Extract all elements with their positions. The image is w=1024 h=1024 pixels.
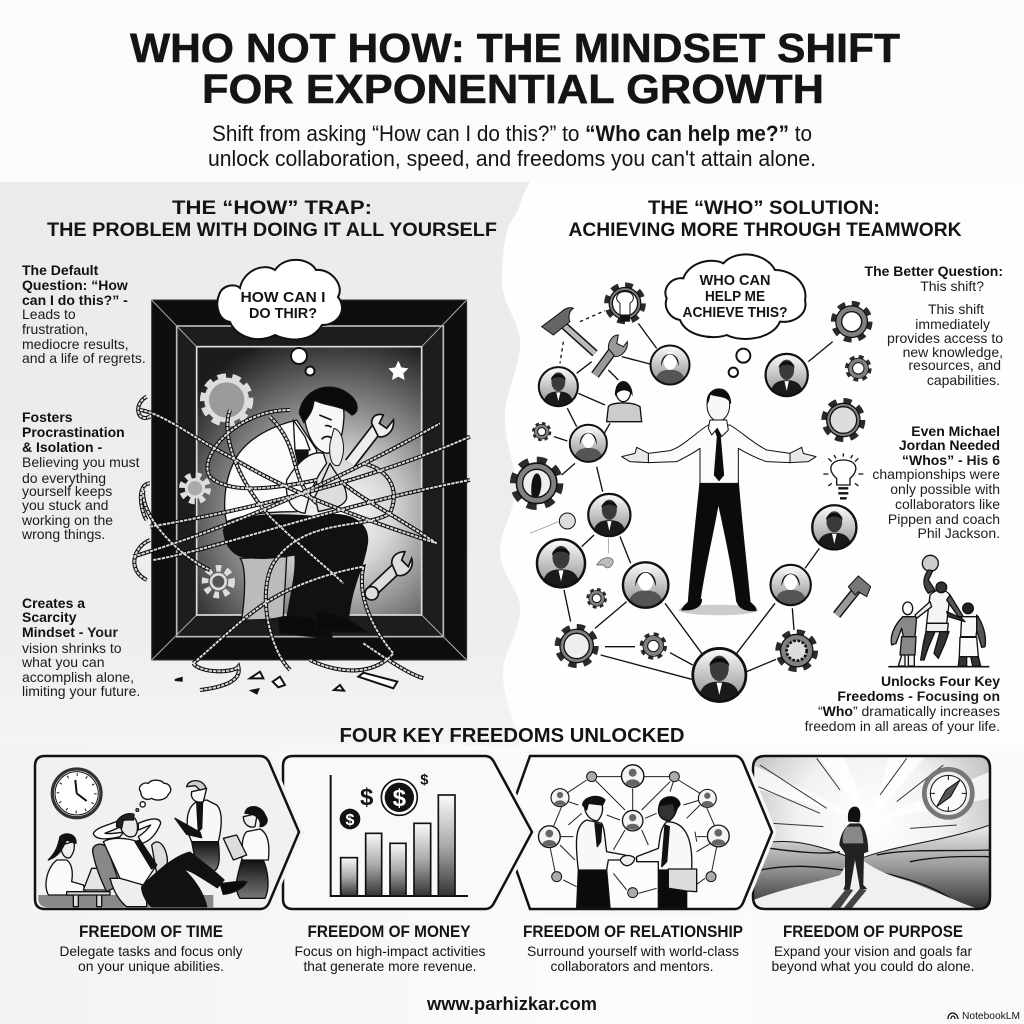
title: WHO NOT HOW: THE MINDSET SHIFT: [130, 25, 900, 71]
text block: default question: mediocre results,: [22, 336, 129, 352]
text block: default question: The Default: [22, 262, 99, 278]
thought bubble text: WHO CAN: [700, 272, 770, 289]
icon: basketball players: [888, 555, 989, 667]
text block: scarcity mindset: [21, 595, 140, 699]
text block: better question: provides access to: [887, 330, 1003, 346]
text block: procrastination: yourself keeps: [22, 483, 112, 499]
right panel background: [500, 183, 1024, 745]
heading: how trap: [47, 198, 497, 241]
caption: freedom of purpose: [772, 922, 974, 974]
text block: default question: and a life of regrets.: [22, 350, 146, 366]
panel: freedom of relationship: [503, 756, 772, 909]
text block: better question: new knowledge,: [903, 344, 1003, 360]
notebooklm mark: NotebookLM: [962, 1010, 1020, 1022]
floor shading: [38, 895, 213, 907]
thought bubble: how can I: DO THIR?: [249, 305, 317, 322]
icon: clock: [52, 769, 101, 818]
text block: default question: [22, 262, 146, 366]
icon: dollar coins: $: [393, 785, 406, 812]
section heading: four key freedoms: FOUR KEY FREEDOMS UNLOCKED: [340, 725, 684, 747]
caption: freedom of money: FREEDOM OF MONEY: [308, 922, 471, 941]
subtitle: unlock collaboration, speed, and freedoms you can't attain alone.: [208, 146, 816, 171]
text block: procrastination: Believing you must: [22, 454, 140, 470]
panel: freedom of money: [283, 756, 532, 909]
text block: unlocks freedoms: freedom in all areas of your life.: [805, 718, 1000, 734]
illustration: collaborative network: [515, 254, 871, 703]
colleague with papers: [223, 807, 269, 898]
text block: michael jordan: Jordan Needed: [899, 437, 1000, 453]
caption: freedom of purpose: Expand your vision and goals far: [774, 943, 972, 959]
icon: dollar coins: $: [360, 784, 373, 811]
caption: freedom of relationship: [523, 922, 743, 974]
gears: [515, 287, 869, 668]
text block: procrastination: do everything: [22, 470, 106, 486]
thought bubble text: [682, 272, 788, 321]
text block: better question: This shift: [928, 301, 984, 317]
text block: procrastination: Fosters: [22, 409, 73, 425]
title: [130, 25, 900, 112]
caption: freedom of relationship: FREEDOM OF RELATIONSHIP: [523, 922, 743, 941]
woman with laptop: [46, 834, 115, 907]
text block: procrastination: wrong things.: [21, 526, 105, 542]
text block: better question: [865, 263, 1003, 388]
text block: better question: This shift?: [920, 278, 984, 294]
text block: michael jordan: “Whos” - His 6: [902, 452, 1000, 468]
text block: default question: frustration,: [22, 321, 88, 337]
text block: procrastination: working on the: [21, 512, 113, 528]
caption: freedom of time: [60, 922, 242, 974]
text block: scarcity mindset: Scarcity: [22, 609, 77, 625]
standing colleague with clipboard: [175, 781, 221, 872]
light bulb: [823, 453, 863, 498]
text block: default question: Leads to: [22, 306, 76, 322]
text block: unlocks freedoms: Unlocks Four Key: [881, 673, 1000, 689]
footer url: www.parhizkar.com: [426, 994, 597, 1014]
caption: freedom of money: that generate more revenue.: [304, 958, 476, 974]
text block: better question: immediately: [915, 316, 990, 332]
gears: [182, 377, 249, 595]
wrenches: [350, 414, 412, 600]
dunes: [753, 825, 990, 908]
heading: who solution: ACHIEVING MORE THROUGH TEAMWORK: [568, 220, 962, 241]
bar chart: [331, 775, 468, 896]
text block: scarcity mindset: limiting your future.: [22, 683, 140, 699]
thought bubble text: ACHIEVE THIS?: [682, 304, 788, 321]
caption: freedom of purpose: FREEDOM OF PURPOSE: [783, 922, 963, 941]
handshake figures: [576, 796, 697, 908]
text block: scarcity mindset: vision shrinks to: [22, 640, 122, 656]
text block: michael jordan: Pippen and coach: [888, 511, 1000, 527]
icon: compass: [924, 769, 972, 817]
caption: freedom of money: [294, 922, 486, 974]
title: FOR EXPONENTIAL GROWTH: [202, 66, 824, 112]
text block: unlocks freedoms: Freedoms - Focusing on: [837, 688, 1000, 704]
text block: procrastination: Procrastination: [22, 424, 125, 440]
icon: dollar coins: [340, 772, 428, 829]
text block: default question: can I do this?” -: [22, 292, 128, 308]
heading: how trap: THE PROBLEM WITH DOING IT ALL YOURSELF: [47, 220, 497, 241]
panel: freedom of purpose: [753, 755, 993, 909]
subtitle: [208, 121, 816, 171]
text block: procrastination: [21, 409, 140, 542]
sun rays: [754, 757, 989, 804]
text block: michael jordan: Phil Jackson.: [918, 525, 1000, 541]
panel: freedom of time: [35, 756, 299, 909]
caption: freedom of purpose: beyond what you could do alone.: [772, 958, 974, 974]
text block: michael jordan: championships were: [872, 466, 1000, 482]
heading: who solution: [568, 198, 962, 241]
caption: freedom of time: Delegate tasks and focus only: [60, 943, 242, 959]
icon: dollar coins: $: [420, 772, 428, 788]
network lines: [530, 311, 833, 679]
text block: scarcity mindset: what you can: [21, 654, 104, 670]
illustration: man trapped in box with ropes: [133, 300, 470, 693]
debris: [175, 672, 397, 693]
thought bubble text: HELP ME: [705, 288, 765, 305]
text block: scarcity mindset: Mindset - Your: [22, 624, 118, 640]
text block: better question: The Better Question:: [865, 263, 1003, 279]
lower band background: [0, 745, 1024, 1024]
heading: how trap: THE “HOW” TRAP:: [172, 198, 372, 219]
central figure: [622, 389, 816, 615]
thought bubble: how can I: HOW CAN I: [240, 289, 326, 306]
caption: freedom of relationship: collaborators and mentors.: [550, 958, 714, 974]
figure on horizon: [839, 807, 868, 890]
caption: freedom of time: FREEDOM OF TIME: [79, 922, 223, 941]
text block: better question: resources, and: [908, 357, 1001, 373]
caption: freedom of time: on your unique abilities.: [78, 958, 224, 974]
caption: freedom of money: Focus on high-impact activities: [294, 943, 486, 959]
man: [223, 387, 368, 638]
thought cloud: [136, 780, 171, 811]
left panel background: [0, 182, 530, 745]
subtitle: Shift from asking “How can I do this?” to “Who can help me?” to: [212, 121, 812, 146]
text block: procrastination: & Isolation -: [22, 439, 102, 455]
network: [550, 777, 717, 893]
collaborators: [536, 345, 857, 703]
icon: dollar coins: $: [346, 812, 355, 829]
frame: [152, 300, 467, 660]
text block: michael jordan: only possible with: [890, 481, 1000, 497]
text block: unlocks freedoms: “Who” dramatically increases: [818, 703, 1000, 719]
text block: michael jordan: [872, 423, 1000, 541]
text block: procrastination: you stuck and: [22, 497, 108, 513]
text block: better question: capabilities.: [927, 372, 1000, 388]
caption: freedom of relationship: Surround yourself with world-class: [527, 943, 739, 959]
text block: michael jordan: Even Michael: [911, 423, 1000, 439]
text block: default question: Question: “How: [22, 277, 128, 293]
thought bubble: who can help me: [665, 254, 805, 377]
heading: who solution: THE “WHO” SOLUTION:: [648, 198, 880, 219]
tools: [542, 308, 871, 615]
thought bubble: how can I: [217, 260, 342, 376]
text block: unlocks freedoms: [805, 673, 1000, 734]
text block: scarcity mindset: accomplish alone,: [22, 669, 134, 685]
text block: scarcity mindset: Creates a: [22, 595, 85, 611]
relaxing man on sofa: [93, 814, 247, 907]
star: [388, 361, 408, 380]
ropes: [133, 397, 470, 690]
text block: michael jordan: collaborators like: [895, 496, 1000, 512]
